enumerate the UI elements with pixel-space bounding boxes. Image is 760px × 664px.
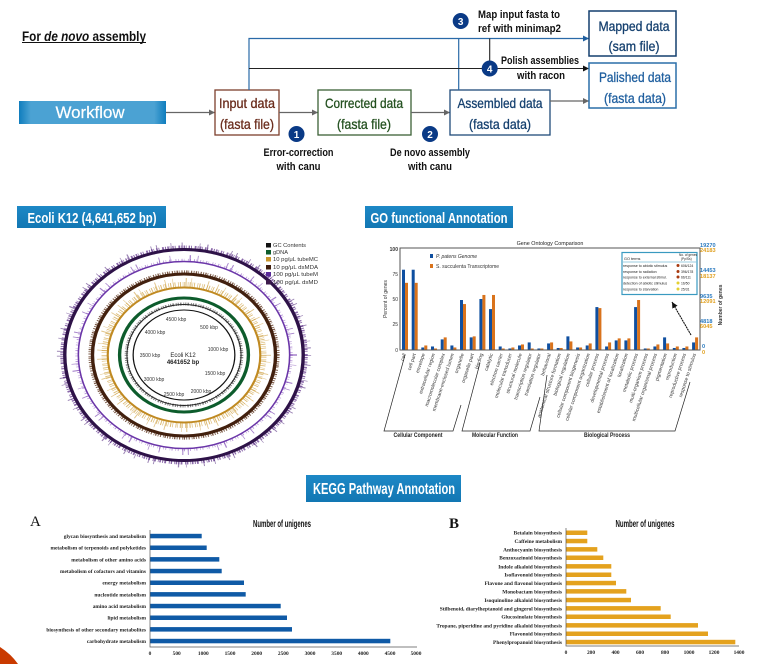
- legend: gDNA: [273, 250, 289, 256]
- step 4: polish assemblies: Polish assemblies: [501, 55, 579, 67]
- center label: Ecoli K12: [170, 353, 196, 359]
- step 3: map input fasta: ref with minimap2: [478, 23, 561, 35]
- box: assembled data: (fasta data): [469, 116, 531, 132]
- row labels: Tropane, piperidine and pyridine alkaloid biosynthesis: [436, 623, 562, 629]
- position labels: 4500 kbp: [166, 317, 187, 323]
- inset table: 66/111: [681, 276, 691, 280]
- bars: [566, 530, 735, 644]
- row labels: glycan biosynthesis and metabolism: [64, 534, 146, 540]
- left axis: [383, 247, 398, 354]
- x axis ticks: [149, 651, 422, 657]
- chart: circular genome plot: [60, 243, 319, 464]
- box: mapped data: Mapped data: [598, 18, 670, 34]
- row labels: Anthocyanin biosynthesis: [503, 547, 562, 553]
- box: input data: [215, 90, 279, 135]
- category labels: multicellular organismal process: [631, 352, 659, 422]
- category brackets: [384, 355, 690, 431]
- category labels: membrane-enclosed lumen: [431, 353, 456, 412]
- category labels: catalytic: [484, 352, 495, 372]
- series: transcriptome: [405, 283, 698, 350]
- row labels: Indole alkaloid biosynthesis: [498, 564, 562, 570]
- category labels: cell: [400, 353, 408, 362]
- category labels: binding: [474, 353, 485, 370]
- position labels: 1500 kbp: [205, 371, 226, 377]
- box: input data: Input data: [219, 95, 275, 111]
- row labels: Monobactam biosynthesis: [502, 589, 562, 595]
- bars: [150, 534, 390, 643]
- left axis: 25: [392, 322, 398, 328]
- category names: Biological Process: [584, 433, 631, 439]
- step 3: map input fasta: 3: [458, 17, 464, 28]
- category labels: cell part: [407, 352, 418, 371]
- legend: [266, 243, 319, 286]
- step 1: error correction: 1: [294, 130, 300, 141]
- genome rings: [60, 246, 308, 464]
- position labels: [140, 317, 229, 398]
- chart A: KEGG number of unigenes: [30, 514, 422, 657]
- title: For de novo assembly: For de novo assembly: [22, 28, 146, 44]
- left axis: Percent of genes: [383, 280, 389, 318]
- x axis ticks: 0: [565, 650, 568, 656]
- box: mapped data: (sam file): [608, 38, 660, 54]
- category labels: biological regulation: [553, 353, 572, 397]
- box: corrected data: (fasta file): [337, 116, 391, 132]
- left axis: 75: [392, 272, 398, 278]
- step 4: polish assemblies: 4: [487, 64, 493, 76]
- left axis: 100: [390, 247, 398, 253]
- row labels: Isoquinoline alkaloid biosynthesis: [484, 598, 562, 604]
- inset table: response to radiation: [623, 270, 657, 274]
- x axis ticks: 4500: [385, 651, 396, 657]
- plot frame: [400, 248, 700, 350]
- inset table: 606/124: [681, 264, 693, 268]
- position labels: 2000 kbp: [191, 389, 212, 395]
- category names: Cellular Component: [394, 433, 442, 439]
- row labels: Phenylpropanoid biosynthesis: [493, 640, 562, 646]
- banner: GO functional Annotation: [365, 206, 513, 228]
- banner: GO functional Annotation: GO functional Annotation: [370, 210, 508, 227]
- category labels: cellular component biogenesis: [555, 352, 582, 419]
- right axis: 9635: [700, 294, 712, 300]
- row labels: [436, 531, 562, 646]
- decorative corner shape: [0, 647, 18, 664]
- category labels: cellular component organization: [564, 353, 592, 422]
- row labels: Isoflavonoid biosynthesis: [504, 573, 562, 579]
- right axis: [700, 243, 724, 356]
- arrow: input to corrected: [279, 112, 318, 114]
- x axis ticks: 5000: [411, 651, 422, 657]
- inset table: detection of abiotic stimulus: [623, 282, 667, 286]
- row labels: Flavonoid biosynthesis: [510, 632, 562, 638]
- legend: [430, 254, 499, 270]
- row labels: metabolism of terpenoids and polyketides: [50, 546, 146, 552]
- step 4: polish assemblies: with racon: [516, 70, 565, 82]
- category labels: anatomical structure formation: [536, 353, 563, 419]
- inset table: 16/50: [681, 282, 690, 286]
- right axis: 19270: [700, 243, 716, 249]
- legend: 100 pg/μL dsMD: [273, 280, 318, 286]
- inset table: [622, 252, 697, 294]
- row labels: Glucosinolate biosynthesis: [501, 615, 562, 621]
- category labels: translation regulator: [524, 352, 543, 397]
- position labels: 2500 kbp: [164, 392, 185, 398]
- banner: KEGG Pathway Annotation: [306, 475, 461, 502]
- row labels: Benzoxazinoid biosynthesis: [499, 556, 562, 562]
- legend: P. patens Genome: [436, 254, 477, 260]
- step 3: map input fasta: Map input fasta to: [478, 9, 560, 21]
- axes: [566, 528, 739, 646]
- inset table: 396/178: [681, 270, 693, 274]
- banner: Workflow: Workflow: [56, 103, 125, 122]
- step 1: error correction: Error-correction: [264, 147, 334, 159]
- arrow: dashed to inset: [672, 302, 691, 335]
- inset table: response to abiotic stimulus: [623, 264, 668, 268]
- panel letter A: A: [30, 514, 41, 530]
- x axis ticks: 1000: [198, 651, 209, 657]
- inset table: No. of genes: [679, 253, 697, 257]
- x axis ticks: 800: [661, 650, 669, 656]
- right axis: 14453: [700, 268, 716, 274]
- banner: Ecoli K12: [17, 206, 166, 228]
- x axis ticks: 1400: [734, 650, 745, 656]
- category labels: macromolecular complex: [424, 352, 447, 407]
- right axis: 24183: [700, 248, 716, 254]
- x axis ticks: 400: [611, 650, 620, 656]
- step 3: map input fasta: [453, 9, 561, 35]
- legend: 100 pg/μL tubeM: [273, 272, 318, 278]
- category labels: localization: [617, 353, 630, 378]
- step 4: polish assemblies: [482, 55, 579, 82]
- axes: [150, 530, 417, 647]
- box: assembled data: [450, 90, 550, 135]
- center label: 4641652 bp: [167, 360, 200, 366]
- box: corrected data: Corrected data: [325, 95, 403, 111]
- position labels: 1000 kbp: [208, 347, 229, 353]
- right axis: Number of genes: [718, 284, 724, 325]
- arrow: black polish line: [249, 68, 589, 70]
- category labels: molecular transducer: [494, 352, 514, 399]
- x axis ticks: 3000: [305, 651, 316, 657]
- left axis: 0: [395, 348, 398, 354]
- right axis: 18137: [700, 274, 716, 280]
- row labels: [46, 534, 147, 645]
- x axis ticks: 1500: [225, 651, 236, 657]
- x axis ticks: 500: [173, 651, 181, 657]
- row labels: biosynthesis of other secondary metabolites: [46, 627, 146, 633]
- arrow: blue map line: [249, 38, 589, 90]
- box: polished data: [589, 63, 676, 108]
- chart title: Gene Ontology Comparison: [517, 241, 583, 247]
- right axis: 6045: [700, 324, 712, 330]
- center label: [167, 353, 200, 366]
- arrow: blue riser from assembled: [458, 38, 460, 90]
- inset table: response to starvation: [623, 288, 658, 292]
- row labels: lipid metabolism: [108, 616, 146, 622]
- position labels: 3000 kbp: [144, 377, 165, 383]
- panel letter B: B: [449, 516, 459, 532]
- position labels: 4000 kbp: [145, 330, 166, 336]
- row labels: energy metabolism: [102, 581, 146, 587]
- box: polished data: Palished data: [599, 69, 671, 85]
- right axis: 0: [702, 344, 705, 350]
- row labels: Caffeine metabolism: [515, 539, 562, 545]
- category labels: envelope: [415, 353, 427, 374]
- x axis ticks: 4000: [358, 651, 369, 657]
- category labels: multi-organism process: [628, 352, 650, 404]
- x axis ticks: 2500: [278, 651, 289, 657]
- category labels: pigmentation: [654, 353, 669, 382]
- banner: Ecoli K12: Ecoli K12 (4,641,652 bp): [28, 210, 156, 227]
- category labels: cellular process: [584, 352, 601, 388]
- category labels: structural molecule: [505, 353, 524, 395]
- x axis ticks: 0: [149, 651, 152, 657]
- x axis ticks: 1200: [709, 650, 720, 656]
- category labels: organelle: [454, 353, 466, 374]
- category labels: organelle part: [461, 352, 476, 384]
- series: P. patens genome: [402, 270, 695, 350]
- row labels: metabolism of cofactors and vitamins: [60, 569, 146, 575]
- right axis: 0: [702, 350, 705, 356]
- category labels: metabolic process: [622, 352, 640, 393]
- inset table: GO terms: [624, 257, 641, 261]
- row labels: Flavone and flavonol biosynthesis: [485, 581, 562, 587]
- step 2: de novo assembly: with canu: [407, 161, 452, 173]
- row labels: nucleotide metabolism: [94, 592, 147, 598]
- inset table: (Pp/Ss): [681, 257, 692, 261]
- arrow: workflow to input: [166, 112, 215, 114]
- x axis ticks: 3500: [331, 651, 342, 657]
- step 2: de novo assembly: [390, 126, 471, 173]
- category labels: [400, 352, 698, 422]
- step 2: de novo assembly: 2: [427, 130, 433, 141]
- step 1: error correction: [264, 126, 334, 173]
- category names: [394, 433, 631, 439]
- banner: KEGG Pathway Annotation: KEGG Pathway Annotation: [313, 481, 455, 498]
- row labels: Stilbenoid, diarylheptanoid and gingerol biosynthesis: [440, 606, 562, 612]
- chart title: Number of unigenes: [616, 519, 675, 530]
- box: assembled data: Assembled data: [458, 95, 543, 111]
- workflow diagram: [19, 9, 676, 173]
- row labels: metabolism of other amino acids: [71, 557, 146, 563]
- position labels: 3500 kbp: [140, 353, 161, 359]
- x axis ticks: 2000: [251, 651, 262, 657]
- category labels: behavioral: [540, 353, 553, 377]
- banner: Workflow: [19, 101, 166, 124]
- row labels: amino acid metabolism: [93, 604, 147, 610]
- row labels: carbohydrate metabolism: [87, 639, 147, 645]
- right axis: 4818: [700, 319, 712, 325]
- x axis ticks: [565, 650, 745, 656]
- category names: Molecular Function: [472, 433, 518, 439]
- inset table: 25/31: [681, 288, 690, 292]
- category labels: extracellular region: [418, 353, 437, 395]
- category labels: electron carrier: [489, 352, 505, 386]
- inset table: response to external stimul.: [623, 276, 667, 280]
- box: mapped data: [589, 11, 676, 56]
- legend: GC Contents: [273, 243, 307, 249]
- arrow: corrected to assembled: [411, 112, 450, 114]
- category labels: reproductive process: [668, 352, 688, 399]
- category labels: developmental process: [589, 352, 611, 404]
- chart: GO comparison bars: [383, 241, 724, 439]
- legend: S. succulenta Transcriptome: [436, 264, 499, 270]
- step 1: error correction: with canu: [276, 161, 320, 173]
- box: polished data: (fasta data): [604, 90, 666, 106]
- box: corrected data: [318, 90, 411, 135]
- right axis: 12091: [700, 299, 716, 305]
- chart B: KEGG secondary metabolism unigenes: [436, 516, 745, 656]
- x axis ticks: 200: [587, 650, 595, 656]
- chart title: Number of unigenes: [253, 519, 311, 530]
- x axis ticks: 1000: [684, 650, 695, 656]
- category labels: establishment of localization: [596, 353, 621, 414]
- position labels: 500 kbp: [200, 325, 218, 331]
- x axis ticks: 600: [636, 650, 644, 656]
- category labels: reproduction: [665, 353, 679, 381]
- category labels: transcription regulator: [513, 352, 534, 401]
- arrow: assembled to polished: [550, 100, 589, 102]
- legend: 10 pg/μL dsMDA: [273, 265, 319, 271]
- arrow: black riser: [489, 38, 491, 68]
- box: input data: (fasta file): [220, 116, 274, 132]
- legend: 10 pg/μL tubeMC: [273, 257, 318, 263]
- category labels: response to stimulus: [678, 352, 698, 398]
- left axis: 50: [392, 297, 398, 303]
- row labels: Betalain biosynthesis: [514, 531, 562, 537]
- step 2: de novo assembly: De novo assembly: [390, 147, 471, 159]
